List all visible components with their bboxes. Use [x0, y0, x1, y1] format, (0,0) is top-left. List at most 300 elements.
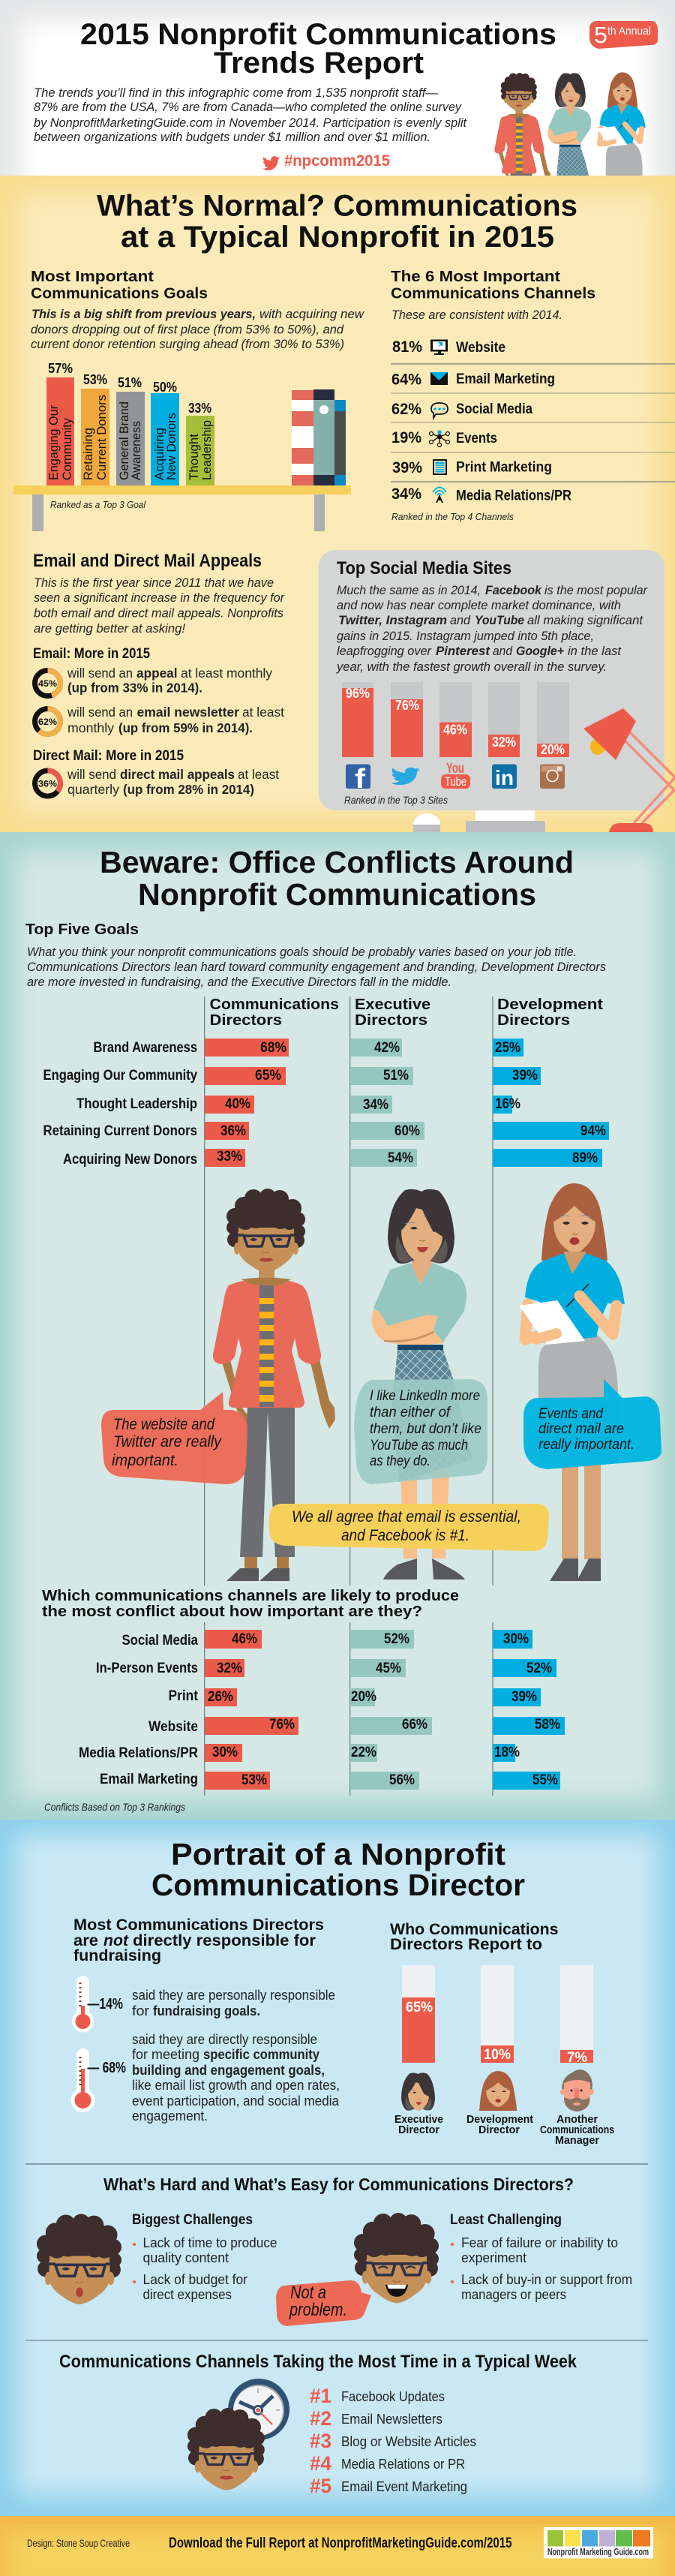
face: laughing director [354, 2213, 439, 2303]
text block: fundraising heading: Most Communications Directors [74, 1916, 324, 1934]
list: time ranking: #1 [310, 2385, 332, 2407]
text block: most important goals: This is a big shift from previous years, [32, 308, 256, 321]
speech bubble: communications director [101, 1392, 248, 1484]
heading: Beware: Office Conflicts Around [100, 845, 574, 879]
channel: website: 81% [392, 338, 422, 356]
text block: email and direct mail appeals: are getting better at asking! [34, 622, 185, 636]
text block: fundraising heading: not [104, 1932, 129, 1949]
icon: thermometer 68% [70, 2048, 126, 2112]
title [80, 18, 556, 80]
chart: top five goals by role: Brand Awareness [93, 1040, 197, 1056]
speech bubble: executive director: I like LinkedIn more [370, 1388, 480, 1404]
bar: executive director [402, 1965, 435, 2063]
channel: email marketing: Email Marketing [456, 371, 555, 387]
heading: Portrait of a Nonprofit [171, 1837, 506, 1871]
chart: channel conflict by role [79, 1630, 565, 1790]
book: thought leadership: 33% [188, 401, 212, 416]
channel: events [392, 429, 497, 447]
text block: most important goals: current donor retention surging ahead (from 30% to 53%) [31, 338, 344, 351]
book: thought leadership [186, 401, 214, 485]
chart: top five goals by role: Retaining Current Donors [44, 1123, 197, 1139]
chart: channel conflict by role: 76% [269, 1717, 295, 1733]
note: Conflicts Based on Top 3 Rankings [44, 1801, 185, 1813]
list: time ranking: Media Relations or PR [341, 2457, 465, 2472]
speech bubble: executive director: them, but don’t like [370, 1421, 482, 1437]
call to action: Download the Full Report at NonprofitMarketingGuide.com/2015 [169, 2535, 512, 2551]
note: Ranked as a Top 3 Goal [50, 499, 146, 510]
text block: email and direct mail appeals: quarterly [68, 782, 119, 797]
panel: top social media sites: Top Social Media Sites [337, 558, 512, 579]
text block: email and direct mail appeals [33, 551, 285, 797]
panel: portrait of a communications director [0, 1820, 675, 2516]
book: acquiring new donors: Acquiring [152, 428, 166, 480]
chart: top five goals by role: 42% [374, 1040, 400, 1056]
heading: hard and easy: What’s Hard and What’s Easy for Communications Directors? [104, 2175, 574, 2194]
icon: thermometer 14%: —14% [87, 1996, 123, 2012]
chart: channel conflict by role: 26% [208, 1689, 233, 1705]
speech bubble: development director: direct mail are [538, 1421, 624, 1437]
chart: channel conflict by role: 58% [535, 1717, 560, 1733]
channel: social media [392, 401, 532, 418]
chart: channel conflict by role: Media Relations/PR [79, 1745, 198, 1761]
bar: another communications manager: 7% [567, 2050, 587, 2066]
text block: biggest challenges: quality content [142, 2250, 229, 2265]
intro text: between organizations with budgets under $1 million and over $1 million. [34, 131, 430, 144]
icon: clock [228, 2379, 290, 2440]
list: time ranking: Blog or Website Articles [341, 2434, 476, 2449]
chart: channel conflict by role: Email Marketing [100, 1772, 198, 1787]
chart: channel conflict by role: 53% [242, 1772, 267, 1788]
panel: top social media sites: gains in 2015. Instagram jumped into 5th place, [337, 630, 594, 643]
icon: facebook: f [355, 763, 366, 794]
channel: media relations: Media Relations/PR [456, 488, 572, 504]
chart: channel conflict by role: 18% [494, 1745, 520, 1760]
intro text [34, 86, 467, 144]
chart: channel conflict by role: 30% [212, 1745, 238, 1760]
panel: top social media sites: Facebook [485, 584, 542, 597]
bar: instagram: 20% [541, 741, 565, 757]
bar: development director: 10% [484, 2047, 511, 2063]
text block: email and direct mail appeals: at least [242, 705, 284, 720]
donut: 45% [34, 671, 60, 696]
icon: linkedin: in [495, 766, 514, 789]
text block: email and direct mail appeals: Email and Direct Mail Appeals [33, 551, 262, 571]
text block: email and direct mail appeals: (up from 33% in 2014). [68, 680, 202, 695]
panel: top social media sites: Pinterest [436, 645, 491, 658]
chart: top five goals by role: Engaging Our Community [44, 1068, 197, 1084]
channel: media relations [392, 485, 572, 504]
chart: channel conflict by role: 45% [376, 1661, 401, 1676]
chart: goals as books on a shelf [14, 361, 351, 531]
bar: youtube [440, 682, 472, 757]
panel: header [0, 0, 675, 176]
chart: top five goals by role: Acquiring New Donors [63, 1152, 197, 1168]
speech bubble: development director: Events and [538, 1406, 604, 1422]
illustration: executive director [372, 1189, 472, 1580]
channel: email marketing [392, 371, 555, 389]
text block: top five goals [26, 921, 606, 989]
text block: email and direct mail appeals: will send an [67, 705, 133, 720]
bar: facebook [342, 682, 374, 757]
speech bubble: not a problem: problem. [289, 2300, 347, 2320]
icon: desk lamp [584, 708, 675, 832]
bar: development director [481, 1965, 514, 2063]
speech bubble: executive director: as they do. [370, 1453, 430, 1469]
panel: top social media sites: and now has near complete market dominance, with [337, 599, 621, 612]
text: engagement goals: event participation, and social media [132, 2094, 340, 2109]
column headings: Development [497, 996, 603, 1013]
donut: 62%: 62% [38, 717, 57, 727]
panel: footer [0, 2516, 675, 2576]
text block: biggest challenges: Lack of time to produce [142, 2235, 278, 2250]
chart: channel conflict by role: 32% [217, 1661, 242, 1676]
text: engagement goals: engagement. [132, 2109, 208, 2124]
text block: most important goals: Most Important [31, 269, 154, 285]
text block: least challenging: Least Challenging [450, 2212, 562, 2228]
text block: email and direct mail appeals: Email: More in 2015 [33, 646, 150, 662]
panel: top social media sites: is the most popular [544, 584, 648, 597]
bar: twitter [391, 682, 423, 757]
text block: email and direct mail appeals: monthly [68, 720, 114, 735]
labels: reports: Director [478, 2124, 520, 2136]
text block: email and direct mail appeals: This is the first year since 2011 that we have [34, 576, 274, 590]
text block: biggest challenges: direct expenses [142, 2287, 232, 2302]
text block: most important goals: with acquiring new [260, 308, 364, 321]
text block: fundraising heading: directly responsible for [133, 1932, 316, 1949]
donut: 36% [34, 771, 60, 796]
intro text: 87% are from the USA, 7% are from Canada—who completed the online survey [34, 101, 463, 114]
channel: website [392, 338, 506, 356]
panel: what's normal [0, 176, 675, 832]
panel: office conflicts [0, 832, 675, 1820]
text block: biggest challenges: Biggest Challenges [132, 2212, 253, 2228]
donut: 36%: 36% [38, 779, 57, 789]
face: executive director [401, 2073, 435, 2111]
book: acquiring new donors: 50% [153, 380, 177, 395]
text block: least challenging: managers or peers [461, 2287, 566, 2302]
text block: least challenging: Fear of failure or inability to [461, 2235, 618, 2250]
labels: reports: Director [398, 2124, 440, 2136]
column headings: Directors [497, 1012, 570, 1029]
speech bubble: development director: really important. [538, 1437, 634, 1453]
text block: least challenging: experiment [461, 2250, 526, 2265]
book: general brand awareness: 51% [118, 375, 142, 390]
heading: channel conflict [42, 1587, 459, 1620]
panel: top social media sites: and [493, 645, 513, 658]
badge: 5th annual: th Annual [608, 25, 651, 38]
title: Trends Report [214, 47, 424, 80]
bar: youtube: 46% [443, 722, 467, 737]
heading [100, 845, 574, 912]
panel: top social media sites: Twitter, Instagram [338, 614, 447, 627]
labels: reports: Manager [555, 2134, 599, 2147]
text block: top five goals: are more invested in fundraising, and the Executive Directors fall in the middle. [27, 975, 452, 989]
bar: twitter: 76% [395, 697, 419, 713]
book: engaging our community: 57% [48, 361, 73, 376]
text block: fundraising heading [74, 1916, 324, 1964]
panel: top social media sites: Google+ [516, 645, 564, 658]
text block: most important goals: donors dropping out of first place (from 53% to 50%), and [31, 323, 344, 337]
text: fundraising goals [132, 1988, 335, 2018]
intro text: by NonprofitMarketingGuide.com in November 2014. Participation is evenly split [34, 116, 467, 130]
text block: top five goals: Communications Directors lean hard toward community engagement and branding, Development Directors [27, 960, 606, 974]
chart: top five goals by role: Thought Leadership [76, 1096, 197, 1112]
chart: top five goals by role: 34% [363, 1097, 388, 1113]
heading: who they report to [390, 1921, 558, 1953]
speech bubble: shared: and Facebook is #1. [341, 1527, 470, 1544]
chart: channel conflict by role: Print [168, 1688, 199, 1704]
shelf [14, 485, 351, 531]
column headings: Executive [355, 996, 430, 1013]
book: retaining current donors [81, 372, 110, 485]
chart: channel conflict by role: 20% [351, 1689, 376, 1705]
text block: email and direct mail appeals: (up from 28% in 2014) [123, 782, 254, 797]
chart: channel conflict by role: 56% [389, 1772, 415, 1788]
panel: top social media sites: and [450, 614, 471, 627]
bar: executive director: 65% [406, 2000, 433, 2015]
text: engagement goals: specific community [203, 2047, 320, 2062]
chart: top five goals by role: 36% [220, 1123, 246, 1139]
channel: print marketing [392, 459, 552, 476]
heading [152, 1837, 525, 1902]
panel: top social media sites [319, 550, 664, 810]
book: engaging our community [46, 361, 74, 485]
chart: top five goals by role: 60% [394, 1123, 420, 1139]
chart: channel conflict by role: 66% [402, 1717, 428, 1733]
icon: facebook [346, 763, 370, 794]
text block: most important channels: Communications Channels [391, 285, 596, 302]
text block: top five goals: Top Five Goals [26, 921, 139, 938]
chart: channel conflict by role: 52% [526, 1661, 552, 1676]
chart: channel conflict by role: Website [148, 1719, 198, 1735]
book: retaining current donors: 53% [83, 372, 107, 387]
icon: youtube: Tube [445, 774, 466, 789]
chart: top five goals by role: 68% [260, 1040, 286, 1056]
book: thought leadership: Leadership [200, 420, 214, 480]
text block: biggest challenges [132, 2212, 278, 2302]
icon: thermometer 68%: — 68% [87, 2060, 126, 2076]
text block: top five goals: What you think your nonprofit communications goals should be probably varies based on your job title. [27, 945, 577, 959]
credit: Design: Stone Soup Creative [27, 2537, 130, 2549]
channel: events: 19% [392, 429, 422, 446]
chart: channel conflict by role: 46% [232, 1631, 257, 1647]
book: acquiring new donors [151, 380, 179, 485]
chart: top five goals by role [44, 1039, 609, 1168]
icon: youtube: You [446, 761, 464, 777]
chart: top five goals by role: 51% [383, 1068, 409, 1084]
book: retaining current donors: Current Donors [94, 395, 109, 480]
bar: linkedin [488, 682, 520, 757]
icon: linkedin [492, 764, 517, 789]
text block: email and direct mail appeals: Direct Mail: More in 2015 [33, 748, 184, 764]
heading: who they report to: Directors Report to [390, 1936, 542, 1953]
book: general brand awareness: General Brand [117, 401, 131, 480]
list: channels [391, 338, 675, 522]
text block: most important channels: These are consistent with 2014. [392, 308, 562, 322]
panel: top social media sites: leapfrogging over [337, 645, 432, 658]
text block: email and direct mail appeals: direct mail appeals [120, 767, 235, 782]
list: time ranking: #3 [310, 2430, 332, 2452]
text: engagement goals: said they are directly responsible [132, 2032, 317, 2047]
chart: channel conflict by role: 55% [532, 1772, 558, 1788]
chart: channel conflict by role: 22% [351, 1745, 376, 1760]
logo [544, 2527, 653, 2559]
text block: email and direct mail appeals: will send an [67, 666, 133, 681]
badge: 5th annual: 5 [594, 22, 608, 48]
text: engagement goals [132, 2032, 340, 2124]
chart: top five goals by role: 89% [572, 1150, 598, 1166]
panel: top social media sites: Much the same as in 2014, [337, 584, 481, 597]
text block: email and direct mail appeals: (up from 59% in 2014). [118, 720, 253, 735]
text block: least challenging [450, 2212, 632, 2302]
desk items [413, 810, 545, 832]
hashtag with twitter icon: #npcomm2015 [284, 152, 390, 170]
heading: channel conflict: the most conflict about how important are they? [42, 1603, 422, 1620]
text block: email and direct mail appeals: at least monthly [181, 666, 272, 681]
list: time ranking: Facebook Updates [341, 2389, 445, 2404]
book: thought leadership: Thought [187, 434, 201, 480]
speech bubble: executive director: than either of [370, 1405, 452, 1420]
channel: website: Website [456, 340, 506, 356]
book: engaging our community: Engaging Our [46, 405, 61, 480]
text block: most important channels: The 6 Most Important [391, 269, 560, 285]
list: time ranking: Email Event Marketing [341, 2479, 467, 2494]
panel: top social media sites: in the last [568, 645, 622, 658]
channel: social media: Social Media [456, 401, 532, 417]
heading: who they report to: Who Communications [390, 1921, 558, 1938]
chart: top five goals by role: 40% [225, 1096, 250, 1112]
icon: twitter [391, 768, 420, 785]
list: time ranking: #2 [310, 2407, 332, 2430]
icon: instagram [540, 764, 565, 789]
icon: youtube [441, 761, 470, 789]
text block: most important channels [391, 269, 596, 322]
speech bubble: not a problem: Not a [290, 2283, 326, 2303]
heading: What’s Normal? Communications [97, 189, 578, 222]
speech bubble: communications director: The website and [113, 1416, 215, 1433]
chart: channel conflict by role: Social Media [122, 1633, 198, 1649]
chart: top five goals by role: 16% [495, 1096, 520, 1112]
list: time ranking [310, 2385, 476, 2497]
text block: email and direct mail appeals: appeal [136, 666, 177, 681]
title: 2015 Nonprofit Communications [80, 18, 556, 51]
text block: most important goals [31, 269, 364, 351]
face: surprised director [37, 2214, 122, 2304]
channel: media relations: 34% [392, 485, 422, 503]
panel: top social media sites: all making significant [527, 614, 644, 627]
note: Ranked in the Top 3 Sites [344, 795, 448, 806]
chart: top five goals by role: 25% [495, 1040, 520, 1056]
chart: top five goals by role: 65% [255, 1068, 281, 1084]
book: acquiring new donors: New Donors [164, 413, 178, 480]
text: fundraising goals: for [132, 2003, 149, 2018]
column headings [210, 996, 603, 1029]
channel: social media: 62% [392, 401, 422, 418]
heading: channel conflict: Which communications channels are likely to produce [42, 1587, 459, 1604]
heading: Nonprofit Communications [138, 877, 536, 912]
chart: top five goals by role: 33% [217, 1149, 242, 1165]
badge: 5th annual [590, 21, 658, 49]
donut: 62% [34, 708, 60, 734]
panel: top social media sites: YouTube [475, 614, 524, 627]
decorative books [292, 389, 346, 485]
text: engagement goals: for meeting [132, 2047, 200, 2062]
list: time ranking: #5 [310, 2475, 332, 2497]
heading: at a Typical Nonprofit in 2015 [121, 221, 554, 254]
labels: reports: Development [466, 2113, 533, 2126]
bar: linkedin: 32% [492, 734, 516, 750]
speech bubble: communications director: Twitter are really [113, 1433, 222, 1450]
donut: 45%: 45% [38, 678, 57, 689]
bar: facebook: 96% [346, 685, 370, 701]
speech bubble: shared: We all agree that email is essential, [292, 1508, 521, 1525]
face: development director [479, 2071, 517, 2111]
chart: channel conflict by role: 39% [512, 1689, 537, 1705]
speech bubble: development director [524, 1379, 662, 1469]
text block: most important goals: Communications Goals [31, 285, 208, 302]
icon: thermometer 14% [72, 1976, 123, 2032]
note: Ranked in the Top 4 Channels [392, 511, 514, 522]
labels: reports: Communications [540, 2124, 614, 2136]
labels: reports: Executive [394, 2113, 443, 2126]
heading: most time: Communications Channels Taking the Most Time in a Typical Week [59, 2352, 578, 2372]
list: time ranking: Email Newsletters [341, 2412, 442, 2427]
column headings: Communications [210, 996, 339, 1013]
chart: channel conflict by role: 30% [503, 1631, 529, 1647]
text block: email and direct mail appeals: both email and direct mail appeals. Nonprofits [34, 606, 284, 620]
channel: email marketing: 64% [392, 371, 422, 389]
speech bubble: shared [269, 1504, 549, 1551]
text block: email and direct mail appeals: will send [67, 767, 116, 782]
labels: reports: Another [556, 2113, 598, 2126]
book: engaging our community: Community [60, 418, 74, 480]
bar: instagram [537, 682, 569, 757]
text block: email and direct mail appeals: seen a significant increase in the frequency for [34, 591, 285, 605]
chart: channel conflict by role: 52% [384, 1631, 410, 1647]
intro text: The trends you’ll find in this infographic come from 1,535 nonprofit staff— [34, 86, 439, 100]
book: general brand awareness [116, 375, 145, 485]
speech bubble: executive director: YouTube as much [370, 1438, 468, 1453]
heading: Communications Director [152, 1868, 525, 1902]
text block: biggest challenges: Lack of budget for [142, 2272, 248, 2287]
illustration: communications director [213, 1189, 335, 1581]
chart: top five goals by role: 54% [388, 1150, 413, 1166]
channel: print marketing: Print Marketing [456, 459, 552, 476]
chart: top five goals by role: 94% [580, 1123, 606, 1139]
illustration: development director [519, 1183, 625, 1581]
column headings: Directors [210, 1012, 282, 1029]
chart: channel conflict by role: In-Person Events [96, 1661, 198, 1676]
illustration: three directors [494, 72, 646, 176]
channel: print marketing: 39% [392, 459, 422, 476]
speech bubble: executive director [354, 1379, 488, 1484]
text: engagement goals: building and engagement goals, [132, 2063, 325, 2078]
text block: email and direct mail appeals: email newsletter [136, 705, 239, 720]
text: fundraising goals: said they are personally responsible [132, 1988, 335, 2003]
list: time ranking: #4 [310, 2452, 332, 2475]
text block: fundraising heading: are [74, 1932, 98, 1949]
labels: reports [394, 2113, 614, 2147]
bar: another communications manager [560, 1965, 593, 2066]
text block: fundraising heading: fundraising [74, 1947, 161, 1964]
speech bubble: communications director: important. [112, 1452, 178, 1469]
book: retaining current donors: Retaining [81, 428, 95, 480]
speech bubble: not a problem [276, 2280, 371, 2326]
face: director with clock [188, 2408, 265, 2490]
text block: least challenging: Lack of buy-in or support from [461, 2272, 632, 2287]
channel: events: Events [456, 431, 497, 446]
panel: top social media sites: year, with the fastest growth overall in the survey. [336, 660, 607, 674]
